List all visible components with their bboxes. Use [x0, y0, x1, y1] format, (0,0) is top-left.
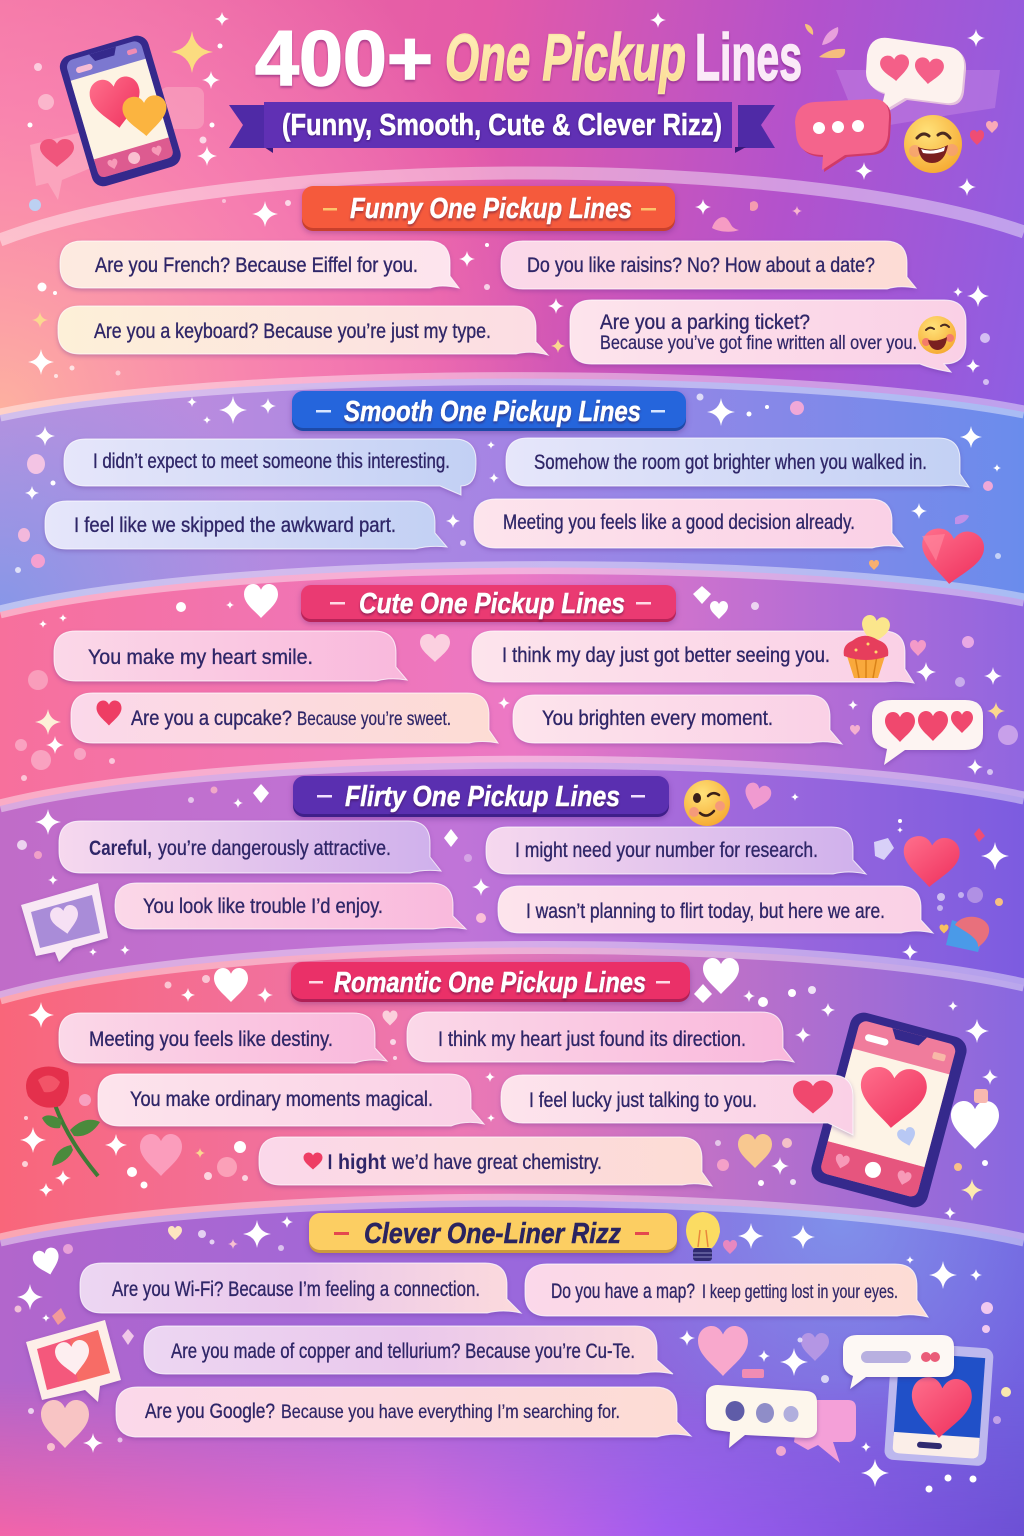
icon: phone with hearts, top left	[30, 31, 213, 200]
bubble: French	[60, 241, 459, 288]
decorations: clever	[14, 1216, 1011, 1492]
bubble: heart smile: You make my heart smile.	[88, 646, 313, 669]
bubble: cupcake: Are you a cupcake?	[131, 707, 292, 730]
bubble: Google: Because you have everything I’m searching for.	[281, 1402, 620, 1423]
bubble: magical: You make ordinary moments magical.	[130, 1088, 433, 1111]
bubble: cupcake	[71, 693, 498, 743]
icon: love letter	[940, 917, 989, 952]
bubble: trouble	[115, 883, 466, 929]
bubble: destiny: Meeting you feels like destiny.	[89, 1028, 333, 1051]
heading: funny	[302, 186, 675, 231]
heading: funny: Funny One Pickup Lines	[350, 193, 632, 225]
section: smooth	[15, 391, 1001, 587]
bubble: careful: Careful,	[89, 837, 152, 860]
bubble: Google	[116, 1387, 691, 1437]
bubble: brighter	[506, 438, 969, 487]
heading: clever: Clever One-Liner Rizz	[364, 1218, 621, 1250]
bubble: flirt today	[498, 886, 933, 933]
bubble: French: Are you French? Because Eiffel for you.	[95, 254, 418, 277]
section: romantic	[20, 958, 999, 1219]
heading: cute: Cute One Pickup Lines	[359, 588, 625, 620]
bubble: Google: Are you Google?	[145, 1400, 275, 1423]
bubble: brighter: Somehow the room got brighter when you walked in.	[534, 451, 927, 474]
bubble: keyboard: Are you a keyboard? Because you’re just my type.	[94, 320, 491, 343]
icon: rose	[26, 1066, 100, 1176]
decorations: smooth	[15, 394, 1001, 573]
bubble: interesting	[64, 439, 476, 495]
decorations: romantic	[20, 958, 999, 1219]
title	[255, 14, 802, 102]
icon: phone with heart and chats	[706, 1335, 994, 1466]
bubble: careful: you’re dangerously attractive.	[158, 837, 391, 860]
bubble: Wi-Fi: Are you Wi-Fi? Because I’m feeling a connection.	[112, 1278, 480, 1301]
bubble: magical	[98, 1074, 484, 1126]
icon: cupcake	[844, 614, 891, 678]
bubble: Wi-Fi	[80, 1263, 521, 1313]
icon: big pink heart	[901, 835, 961, 889]
icon: light bulb	[686, 1212, 720, 1261]
bubble: direction	[407, 1012, 794, 1062]
heading: flirty: Flirty One Pickup Lines	[345, 781, 620, 813]
icon: red heart	[918, 527, 986, 587]
bubble: trouble: You look like trouble I’d enjoy.	[143, 895, 383, 918]
bubble: map: Do you have a map?	[551, 1280, 695, 1303]
title: Lines	[695, 20, 802, 94]
bubble: chemistry: I	[327, 1151, 333, 1174]
bubble: chemistry: hight	[338, 1151, 386, 1174]
heading: romantic: Romantic One Pickup Lines	[334, 967, 646, 999]
bubble: copper: Are you made of copper and tellurium? Because you’re Cu-Te.	[171, 1340, 635, 1363]
bubble: chemistry	[259, 1137, 712, 1186]
bubble: heart smile	[54, 631, 407, 681]
decorations: cute	[15, 584, 1018, 781]
bubble: awkward	[45, 501, 447, 549]
icon: chat bubbles and smiling emoji, top right	[795, 24, 1000, 173]
title: One Pickup	[445, 20, 686, 94]
heading: flirty	[293, 776, 669, 817]
bubble: raisins: Do you like raisins? No? How about a date?	[527, 254, 875, 277]
bubble: better day: I think my day just got better seeing you.	[502, 644, 830, 667]
bubble: lucky: I feel lucky just talking to you.	[529, 1089, 757, 1112]
bubble: interesting: I didn’t expect to meet someone this interesting.	[93, 450, 450, 473]
bubble: research	[486, 827, 866, 874]
bubble: parking ticket: Because you’ve got fine written all over you.	[600, 333, 917, 354]
icon: hearts chat bubble	[872, 700, 983, 765]
bubble: parking ticket: Are you a parking ticket?	[600, 311, 810, 334]
subtitle ribbon	[229, 102, 775, 153]
bubble: map	[525, 1264, 928, 1317]
section: funny	[28, 186, 990, 385]
heading: clever	[309, 1213, 677, 1253]
icon: picture card with heart	[26, 1320, 121, 1402]
subtitle ribbon: (Funny, Smooth, Cute & Clever Rizz)	[282, 107, 722, 142]
icon: photo card with heart	[21, 883, 108, 962]
bubble: parking ticket	[570, 300, 966, 372]
bubble: good decision	[474, 499, 903, 548]
bubble: direction: I think my heart just found its direction.	[438, 1028, 746, 1051]
bubble: better day	[472, 614, 914, 683]
heading: romantic	[291, 962, 690, 1002]
heading: smooth: Smooth One Pickup Lines	[344, 396, 641, 428]
bubble: chemistry: we’d have great chemistry.	[391, 1151, 602, 1174]
bubble: map: I keep getting lost in your eyes.	[702, 1282, 898, 1303]
bubble: destiny	[59, 1013, 387, 1063]
section: clever	[14, 1212, 1011, 1492]
bubble: flirt today: I wasn’t planning to flirt today, but here we are.	[526, 900, 885, 923]
section: flirty	[17, 776, 1009, 962]
header: decorative sparkles	[28, 12, 998, 232]
icon: laughing emoji	[918, 316, 956, 354]
title: 400+	[255, 14, 433, 102]
bubble: lucky	[501, 1075, 853, 1135]
section: cute	[15, 584, 1018, 781]
icon: phone with heart, right	[808, 1009, 970, 1211]
bubble: keyboard	[58, 306, 548, 355]
bubble: brighten	[513, 695, 842, 744]
decorations: flirty	[17, 781, 1009, 960]
icon: winking emoji	[684, 780, 730, 826]
bubble: careful	[59, 821, 441, 873]
bubble: awkward: I feel like we skipped the awkward part.	[74, 514, 396, 537]
bubble: brighten: You brighten every moment.	[542, 707, 773, 730]
bubble: good decision: Meeting you feels like a good decision already.	[503, 511, 855, 534]
bubble: cupcake: Because you’re sweet.	[297, 709, 451, 730]
bubble: raisins	[501, 241, 916, 289]
heading: smooth	[292, 391, 686, 431]
bubble: copper	[144, 1326, 673, 1374]
bubble: research: I might need your number for research.	[515, 839, 818, 862]
decorations: funny	[28, 243, 990, 385]
